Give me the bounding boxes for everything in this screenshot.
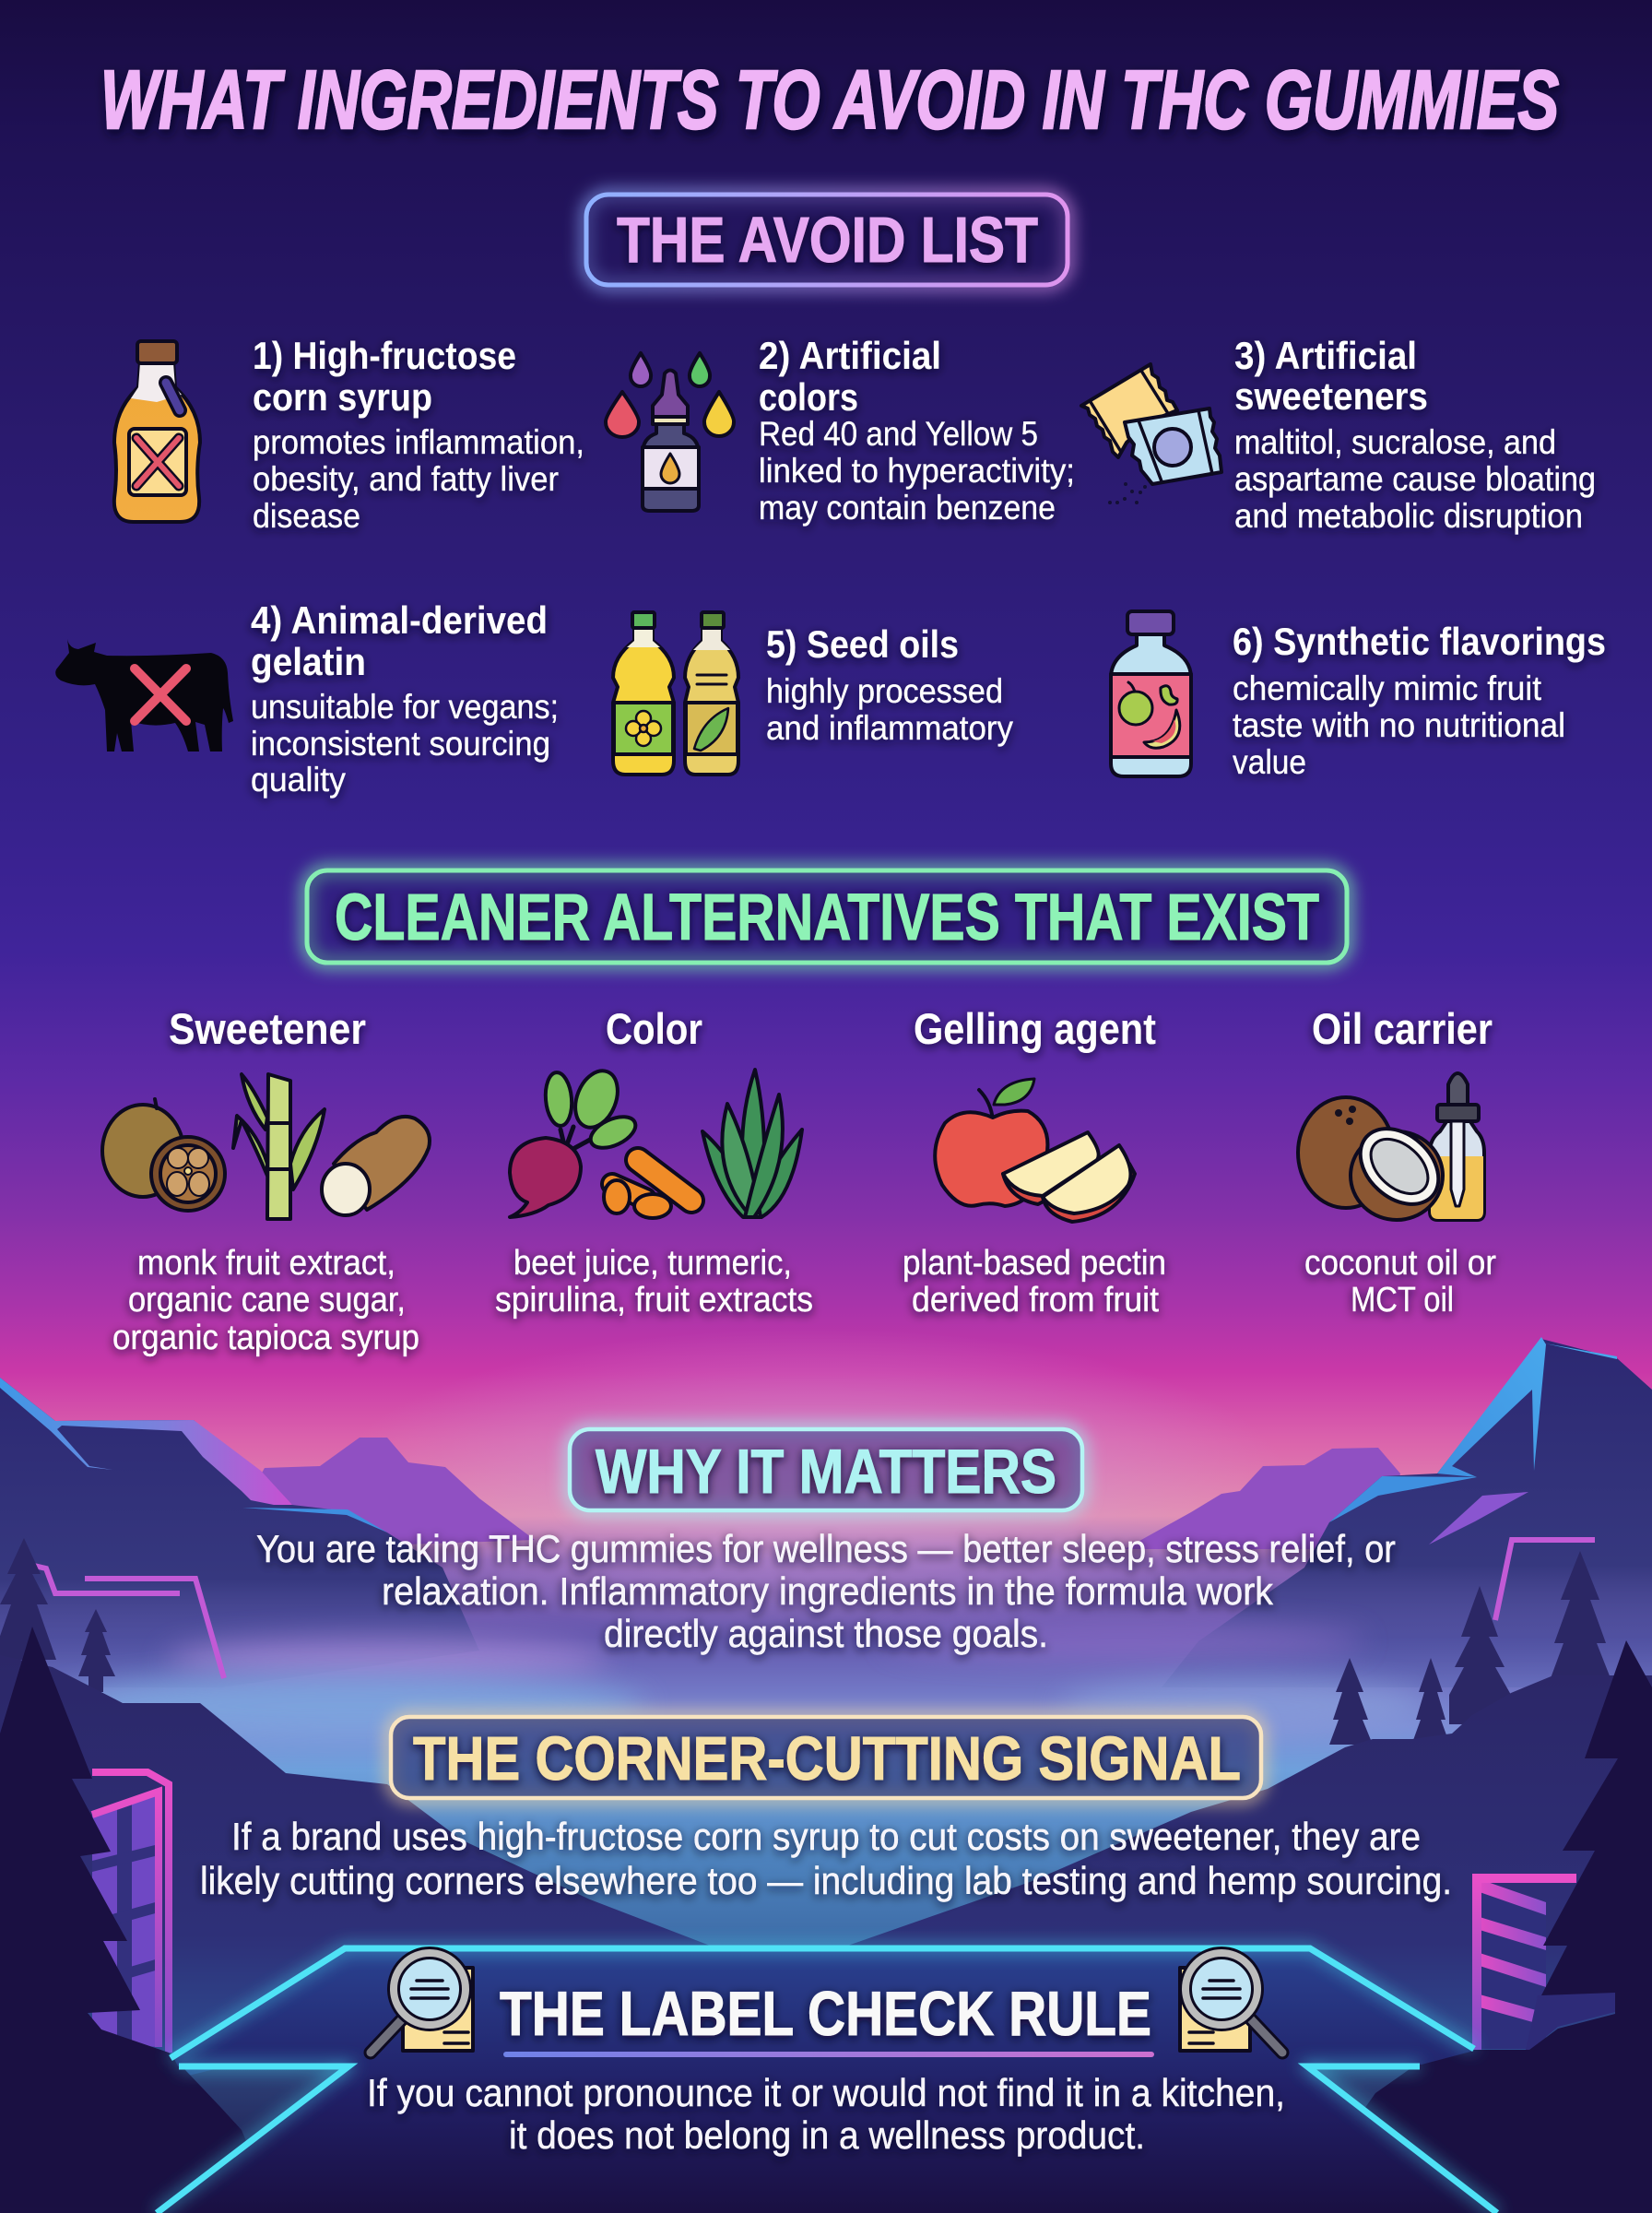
panel: the corner-cutting signal xyxy=(200,1717,1452,1902)
mid hills xyxy=(0,1655,1652,2121)
item text: chemically mimic fruit xyxy=(1233,669,1542,707)
background pine trees xyxy=(0,1538,1611,1745)
avoid item 3: artificial sweeteners xyxy=(1081,334,1596,535)
icon: flavoring bottle xyxy=(1111,611,1191,776)
paragraph: it does not belong in a wellness product. xyxy=(509,2113,1145,2157)
item text: may contain benzene xyxy=(759,489,1056,527)
item text: 4) Animal-derived xyxy=(251,598,548,642)
item text xyxy=(759,334,1075,527)
item text: corn syrup xyxy=(253,375,432,419)
column description xyxy=(1304,1244,1496,1320)
item text: maltitol, sucralose, and xyxy=(1234,423,1556,461)
item text: obesity, and fatty liver xyxy=(253,460,559,498)
paragraph: directly against those goals. xyxy=(604,1612,1048,1655)
column: gelling agent xyxy=(903,1004,1166,1320)
column: color xyxy=(495,1004,813,1320)
column heading: Color xyxy=(606,1004,702,1053)
avoid item 4: animal-derived gelatin xyxy=(55,598,559,799)
item text: and metabolic disruption xyxy=(1234,497,1583,535)
paragraph xyxy=(256,1527,1396,1655)
panel: label check platform xyxy=(157,1948,1497,2213)
item text: 5) Seed oils xyxy=(766,622,959,666)
item text: 3) Artificial xyxy=(1234,334,1417,377)
paragraph: You are taking THC gummies for wellness — better sleep, stress relief, or xyxy=(256,1527,1396,1570)
item text xyxy=(1234,334,1596,535)
item text: disease xyxy=(253,497,360,535)
underline xyxy=(503,2052,1154,2057)
item text: gelatin xyxy=(251,640,366,683)
icon: magnifier over label, left xyxy=(371,1953,473,2053)
item text: promotes inflammation, xyxy=(253,423,584,461)
right mountain range xyxy=(1162,1337,1652,1687)
icon: cow with cross xyxy=(55,639,233,751)
left mountain range xyxy=(0,1378,479,1687)
avoid item 1: high-fructose corn syrup xyxy=(114,334,584,535)
neon outlines upper xyxy=(34,1540,1595,1678)
paragraph xyxy=(367,2071,1285,2157)
icon: magnifier over label, right xyxy=(1180,1953,1282,2053)
avoid item 5: seed oils xyxy=(613,612,1013,775)
item text xyxy=(766,622,1013,747)
heading: the avoid list xyxy=(586,195,1068,285)
heading box: WHY IT MATTERS xyxy=(596,1437,1056,1507)
paragraph: relaxation. Inflammatory ingredients in the formula work xyxy=(382,1569,1274,1613)
column description: organic tapioca syrup xyxy=(112,1319,419,1357)
column: sweetener xyxy=(102,1004,430,1357)
avoid item 2: artificial colors xyxy=(606,334,1075,527)
column heading: Oil carrier xyxy=(1312,1004,1493,1053)
item text: quality xyxy=(251,761,346,799)
heading: cleaner alternatives: CLEANER ALTERNATIVES THAT EXIST xyxy=(335,882,1319,954)
column description: organic cane sugar, xyxy=(128,1281,406,1320)
item text: highly processed xyxy=(766,672,1003,710)
column description: derived from fruit xyxy=(912,1281,1159,1320)
item text: sweeteners xyxy=(1234,374,1428,418)
item text: unsuitable for vegans; xyxy=(251,688,559,726)
panel: the label check rule xyxy=(367,1953,1285,2157)
column: oil carrier xyxy=(1298,1004,1496,1320)
heading: cleaner alternatives xyxy=(307,870,1347,963)
column description xyxy=(112,1244,419,1357)
neon platform outline xyxy=(157,1948,1497,2213)
column description: beet juice, turmeric, xyxy=(513,1244,792,1283)
icon: sweetener packets xyxy=(1081,364,1221,484)
paragraph xyxy=(200,1815,1452,1902)
coconut eye dots xyxy=(1335,1106,1356,1125)
paragraph: likely cutting corners elsewhere too — including lab testing and hemp sourcing. xyxy=(200,1859,1452,1902)
column description: MCT oil xyxy=(1351,1281,1454,1320)
item text xyxy=(253,334,584,535)
icon: syrup bottle xyxy=(114,341,200,522)
icon: beet, turmeric, spirulina xyxy=(510,1064,802,1218)
paragraph: If a brand uses high-fructose corn syrup to cut costs on sweetener, they are xyxy=(231,1815,1421,1858)
item text xyxy=(251,598,559,799)
icon: dropper bottle and color drops xyxy=(606,353,734,511)
distant purple mountains xyxy=(240,1438,1400,1549)
neon building right xyxy=(1477,1878,1576,2050)
item text: taste with no nutritional xyxy=(1233,706,1565,744)
column description xyxy=(495,1244,813,1320)
heading: THE LABEL CHECK RULE xyxy=(500,1979,1151,2049)
lower right ledge xyxy=(1526,1992,1615,2050)
background: central horizon glow xyxy=(332,1328,1291,1641)
column description: plant-based pectin xyxy=(903,1244,1166,1283)
paragraph: If you cannot pronounce it or would not find it in a kitchen, xyxy=(367,2071,1285,2114)
column description xyxy=(903,1244,1166,1320)
neon building left xyxy=(92,1772,169,2053)
column heading: Gelling agent xyxy=(914,1004,1156,1053)
column description: spirulina, fruit extracts xyxy=(495,1281,813,1320)
item text: aspartame cause bloating xyxy=(1234,460,1596,498)
panel: why it matters xyxy=(256,1429,1396,1655)
icon: coconut and oil dropper xyxy=(1298,1073,1484,1220)
item text: inconsistent sourcing xyxy=(251,725,550,763)
column description: monk fruit extract, xyxy=(137,1244,395,1283)
item text: 2) Artificial xyxy=(759,334,941,377)
background: mountain landscape xyxy=(0,1337,1652,2213)
item text: Red 40 and Yellow 5 xyxy=(759,415,1038,453)
column description: coconut oil or xyxy=(1304,1244,1496,1283)
item text: 1) High-fructose xyxy=(253,334,516,377)
item text: colors xyxy=(759,375,858,419)
item text: and inflammatory xyxy=(766,709,1013,747)
heading box: THE CORNER-CUTTING SIGNAL xyxy=(413,1724,1241,1793)
item text xyxy=(1233,620,1606,781)
heading: the avoid list: THE AVOID LIST xyxy=(617,204,1038,276)
avoid item 6: synthetic flavorings xyxy=(1111,611,1606,781)
foreground dark pine trees and ground xyxy=(0,1627,1652,2213)
column heading: Sweetener xyxy=(169,1004,366,1053)
icon: oil bottles xyxy=(613,612,738,775)
icon: monk fruit, sugar cane, tapioca root xyxy=(102,1074,430,1219)
item text: 6) Synthetic flavorings xyxy=(1233,620,1606,663)
icon detail: sweetener specks xyxy=(1108,482,1147,504)
item text: value xyxy=(1233,743,1306,781)
fog bands xyxy=(55,1625,1429,1737)
icon: apple and slices xyxy=(935,1079,1135,1222)
item text: linked to hyperactivity; xyxy=(759,452,1075,490)
